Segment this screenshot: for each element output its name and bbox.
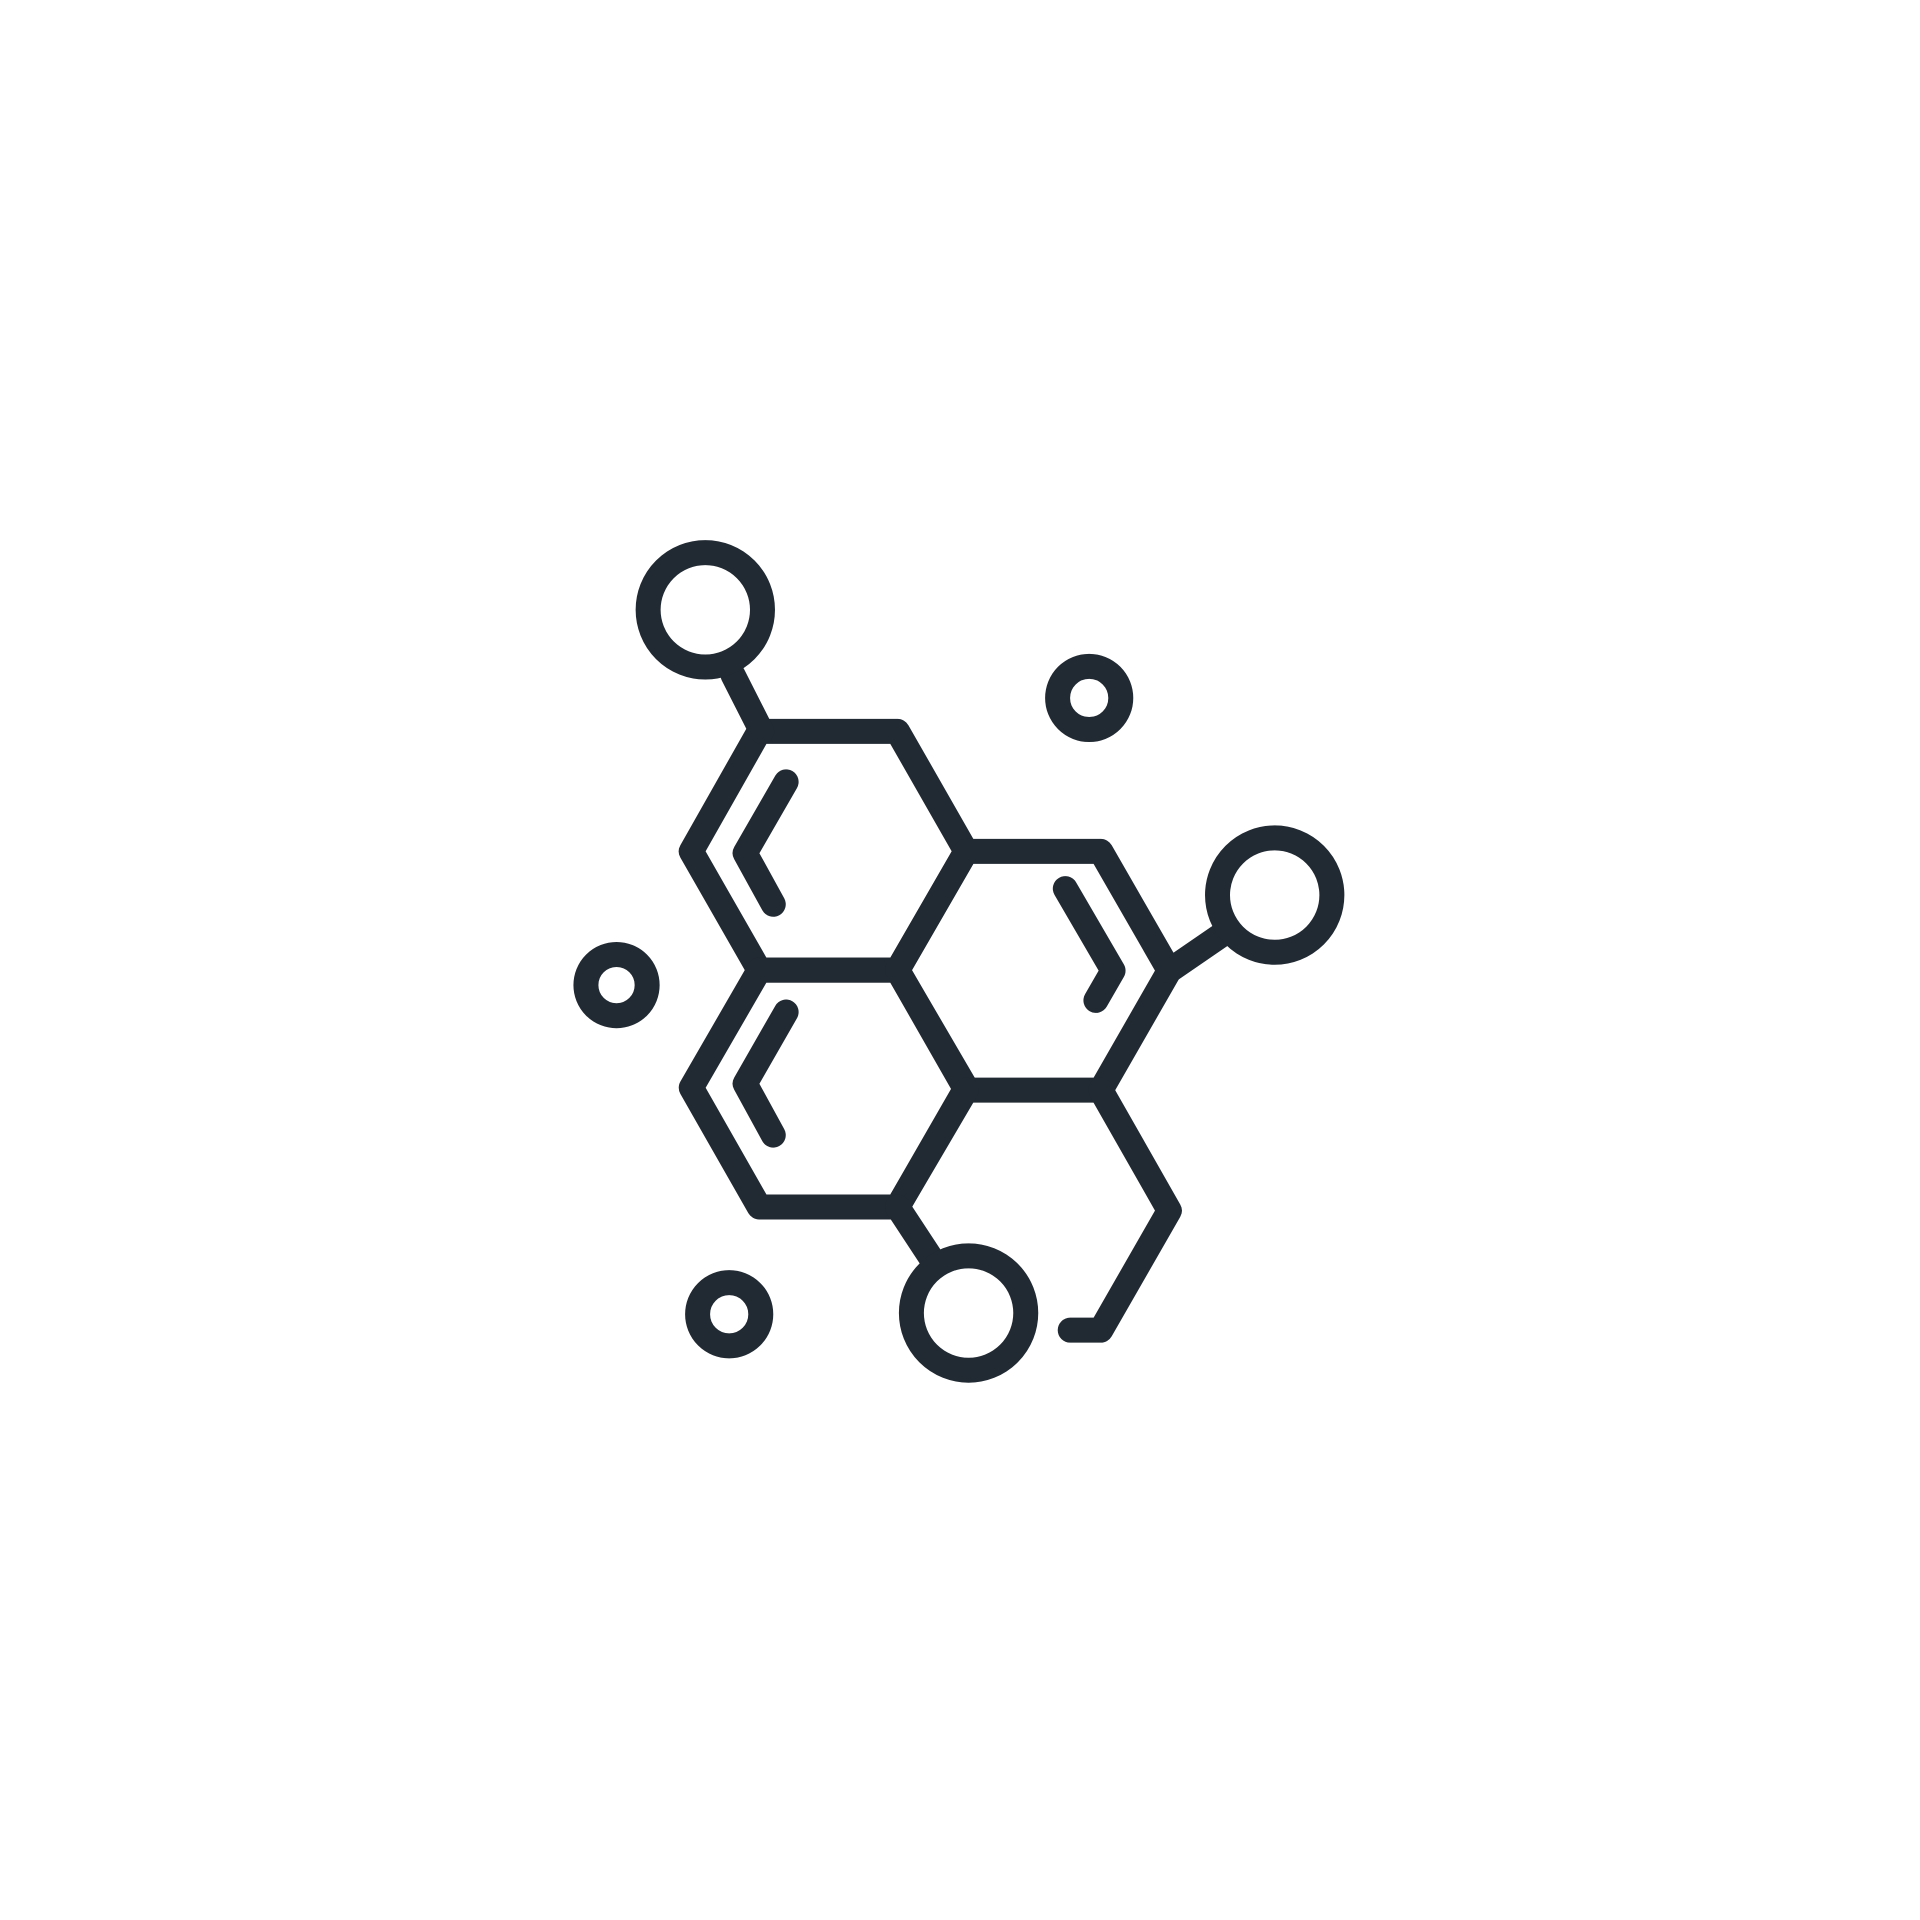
double bond: right chevron (1065, 889, 1113, 1000)
particle: left small circle (586, 954, 647, 1016)
bond: right atom (1169, 935, 1221, 971)
double bond: lower left chevron (745, 1012, 786, 1135)
particle: bottom left small circle (698, 1283, 761, 1346)
hexagon: lower left ring (691, 970, 966, 1207)
bond: top left atom (733, 675, 762, 731)
open ring: lower right chain (898, 1090, 1169, 1330)
particle: top right small circle (1058, 666, 1121, 730)
atom: top left large circle (648, 553, 762, 667)
double bond: upper left chevron (745, 782, 786, 904)
hexagon: upper left ring (691, 731, 966, 970)
bond: bottom atom (898, 1207, 930, 1256)
atom: bottom large circle (911, 1256, 1026, 1370)
atom: right large circle (1218, 838, 1332, 952)
hexagon: right ring (898, 851, 1169, 1090)
